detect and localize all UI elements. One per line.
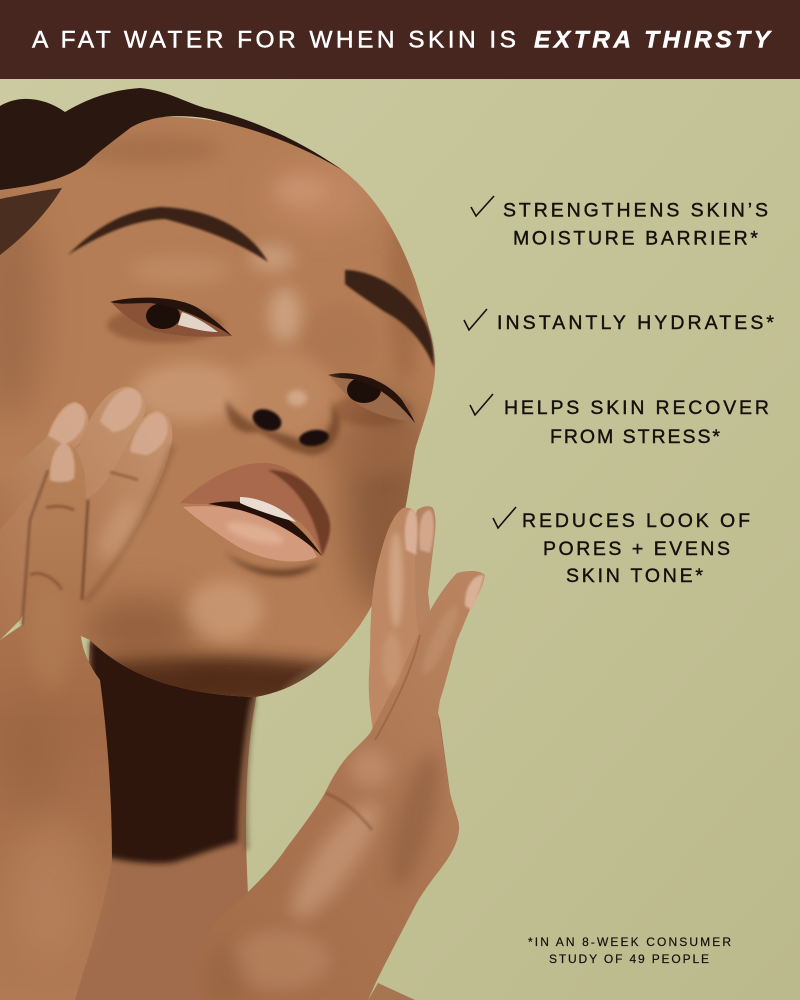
benefit: pores and skin tone: SKIN TONE* <box>566 565 703 587</box>
benefit: moisture barrier <box>471 196 768 250</box>
left hand <box>0 387 173 1000</box>
right hand <box>238 506 485 1000</box>
footnote: *IN AN 8-WEEK CONSUMER <box>528 935 731 949</box>
benefit: stress recovery: FROM STRESS* <box>550 426 720 448</box>
right hand: middle finger <box>369 508 419 730</box>
right eye <box>328 373 415 426</box>
benefit: pores and skin tone <box>493 507 750 587</box>
left eyebrow <box>68 207 268 262</box>
benefit: pores and skin tone: PORES + EVENS <box>543 538 730 560</box>
face <box>0 88 435 708</box>
hair <box>0 88 342 255</box>
right eyebrow <box>345 270 434 368</box>
left hand: second finger <box>0 387 145 640</box>
benefit: pores and skin tone: REDUCES LOOK OF <box>522 510 750 532</box>
lips <box>180 463 331 577</box>
benefit: stress recovery: HELPS SKIN RECOVER <box>504 397 769 419</box>
nose <box>226 351 340 455</box>
banner heading: EXTRA THIRSTY <box>534 26 773 54</box>
right hand: back finger <box>405 506 436 640</box>
shoulder <box>368 983 415 1000</box>
benefit: stress recovery <box>470 394 769 448</box>
top banner <box>0 0 800 79</box>
benefit: moisture barrier: STRENGTHENS SKIN’S <box>503 200 768 222</box>
left hand: nails <box>48 388 168 482</box>
neck <box>70 640 258 1000</box>
left hand: back finger <box>0 402 88 530</box>
right hand: shading, nails and sheen <box>205 509 484 1000</box>
benefit: moisture barrier: MOISTURE BARRIER* <box>513 228 758 250</box>
benefit: hydrates: INSTANTLY HYDRATES* <box>497 312 774 334</box>
left eye <box>107 298 232 343</box>
banner heading: A FAT WATER FOR WHEN SKIN IS <box>32 26 516 54</box>
left hand: third finger <box>75 410 172 600</box>
right hand: lower back finger <box>425 670 459 830</box>
left hand: palm and front finger <box>0 442 112 1000</box>
photo: woman touching her face <box>0 88 485 1000</box>
footnote <box>528 935 731 966</box>
left hand: finger creases and shading <box>0 445 173 960</box>
footnote: STUDY OF 49 PEOPLE <box>549 952 709 966</box>
right hand: index finger and palm <box>194 571 485 1000</box>
